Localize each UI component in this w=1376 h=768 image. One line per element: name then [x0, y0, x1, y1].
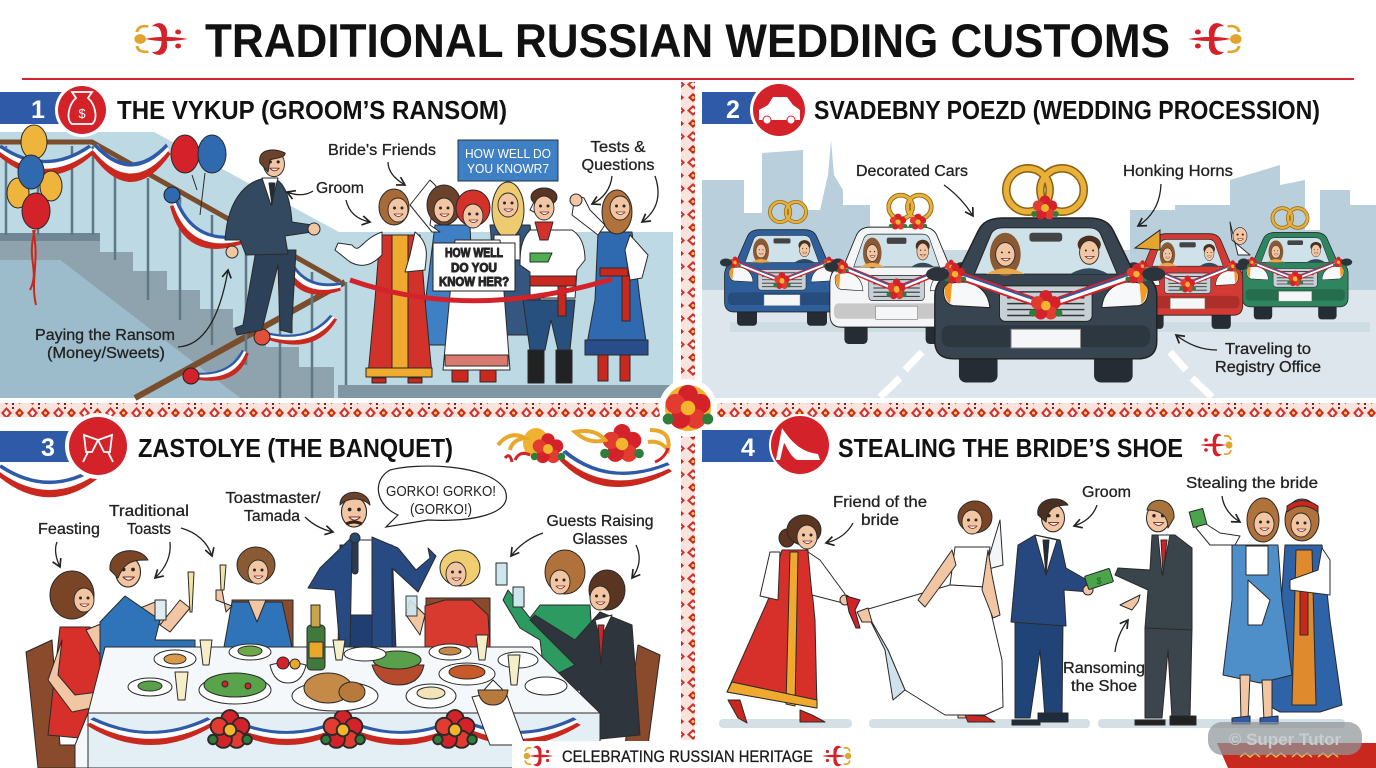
labels panel 4: Friend of the [833, 494, 927, 511]
labels panel 3: Tamada [244, 508, 300, 525]
panel 1 header: THE VYKUP (GROOM’S RANSOM) [117, 95, 507, 125]
speech bubble [378, 466, 506, 527]
labels panel 1: Questions [582, 157, 654, 174]
red ribbon [350, 279, 612, 301]
speech bubble: GORKO! GORKO! [386, 483, 496, 500]
groom climbing stairs [225, 150, 320, 335]
icon: left title ornament [134, 23, 188, 55]
labels panel 2: Decorated Cars [856, 163, 968, 180]
labels panel 2: Registry Office [1215, 359, 1321, 376]
man in blue shirt [100, 551, 195, 685]
skyline and road [702, 140, 1376, 398]
panel 2 header: 2 [726, 96, 740, 124]
corner ornament strip [1217, 743, 1376, 768]
folk floral ornament [498, 424, 669, 463]
footer: CELEBRATING RUSSIAN HERITAGE [562, 747, 813, 766]
wall and staircase background [0, 132, 673, 398]
woman blue dress toasting [216, 547, 292, 647]
labels panel 3: Toasts [127, 521, 171, 538]
panel 4 header: STEALING THE BRIDE’S SHOE [838, 433, 1183, 463]
labels panel 1: Paying the Ransom [35, 327, 175, 344]
panel 4 header: 4 [741, 434, 755, 462]
white sign: DO YOU [451, 261, 497, 275]
panel 2 header [702, 81, 1320, 139]
food and dishes [128, 605, 567, 711]
money: $ [1096, 576, 1102, 586]
labels panel 3: Glasses [572, 531, 628, 548]
watermark [1208, 722, 1362, 755]
stolen red shoe [846, 596, 860, 628]
panel 1 header: 1 [31, 96, 45, 124]
woman in red sarafan [335, 189, 432, 383]
labels panel 2: Honking Horns [1123, 163, 1233, 180]
green car [1238, 208, 1352, 319]
white sign [433, 243, 515, 291]
white sign: KNOW HER? [439, 275, 509, 289]
groom in blue suit [1011, 499, 1094, 725]
friend in blue behind [410, 180, 475, 345]
chairs [26, 598, 660, 768]
labels panel 3 [38, 490, 654, 578]
balloons left [7, 125, 62, 305]
labels panel 2 [856, 163, 1321, 376]
bride [857, 501, 1003, 722]
labels panel 3: Traditional [109, 503, 189, 520]
labels panel 3: Toastmaster/ [226, 490, 321, 507]
stair railings [0, 142, 346, 398]
main decorated car [926, 168, 1165, 382]
labels panel 4: Ransoming [1063, 660, 1145, 677]
woman in blue sarafan [570, 190, 648, 381]
man in dark suit [530, 570, 640, 740]
panel 3 header [0, 413, 453, 479]
bride's friends group [335, 180, 648, 383]
labels panel 3: Guests Raising [546, 513, 654, 530]
icon: right title ornament [1188, 23, 1242, 55]
labels panel 1: Groom [316, 180, 364, 197]
blue car [720, 202, 844, 326]
banquet table [75, 647, 600, 768]
labels panel 1: Tests & [590, 139, 646, 156]
white car [825, 195, 969, 344]
blue sign: HOW WELL DO [465, 146, 551, 161]
blonde guest [406, 550, 490, 647]
green guest [496, 550, 595, 680]
panel 2 header: SVADEBNY POEZD (WEDDING PROCESSION) [814, 95, 1320, 125]
labels panel 2: Traveling to [1225, 341, 1311, 358]
footer [512, 741, 862, 768]
labels panel 1: (Money/Sweets) [47, 345, 165, 362]
toastmaster [308, 492, 436, 650]
panel 3 header: 3 [41, 434, 55, 462]
labels panel 3: Feasting [38, 521, 100, 538]
man in grey suit [1115, 500, 1196, 725]
man in white shirt [520, 188, 585, 383]
red car [1128, 230, 1247, 329]
woman in red [48, 571, 168, 740]
labels panel 4: Stealing the bride [1186, 475, 1318, 492]
balloons right [171, 135, 226, 215]
money [1084, 568, 1114, 590]
friend of the bride [727, 515, 850, 723]
bunting corners [0, 451, 669, 492]
center medallion [659, 379, 717, 437]
labels panel 1 [35, 139, 658, 362]
watermark: © Super Tutor [1229, 730, 1342, 749]
labels panel 4: the Shoe [1071, 678, 1137, 695]
blue sign: YOU KNOWR7 [467, 161, 549, 176]
panel 1 header [0, 83, 507, 137]
panel 4 header [702, 414, 1183, 476]
two women in folk dress [1189, 498, 1342, 724]
labels panel 4 [826, 475, 1318, 695]
woman in white with headdress [443, 190, 510, 382]
waving passenger [1230, 222, 1250, 255]
labels panel 4: Groom [1082, 484, 1131, 501]
speech bubble: (GORKO!) [410, 501, 472, 518]
floor shadows [719, 719, 1345, 728]
panel: zastolye [0, 413, 1376, 768]
labels panel 1: Bride's Friends [328, 142, 436, 159]
blue sign [458, 140, 558, 181]
blonde friend behind [490, 182, 548, 335]
panel 3 header: ZASTOLYE (THE BANQUET) [138, 433, 453, 463]
panel 1 header: $ [78, 106, 86, 121]
icon: heading ornament [1200, 434, 1232, 456]
white sign: HOW WELL [445, 246, 503, 260]
labels panel 4: bride [861, 512, 899, 529]
title: TRADITIONAL RUSSIAN WEDDING CUSTOMS [205, 14, 1170, 67]
panel: stealing the shoe [512, 414, 1376, 768]
